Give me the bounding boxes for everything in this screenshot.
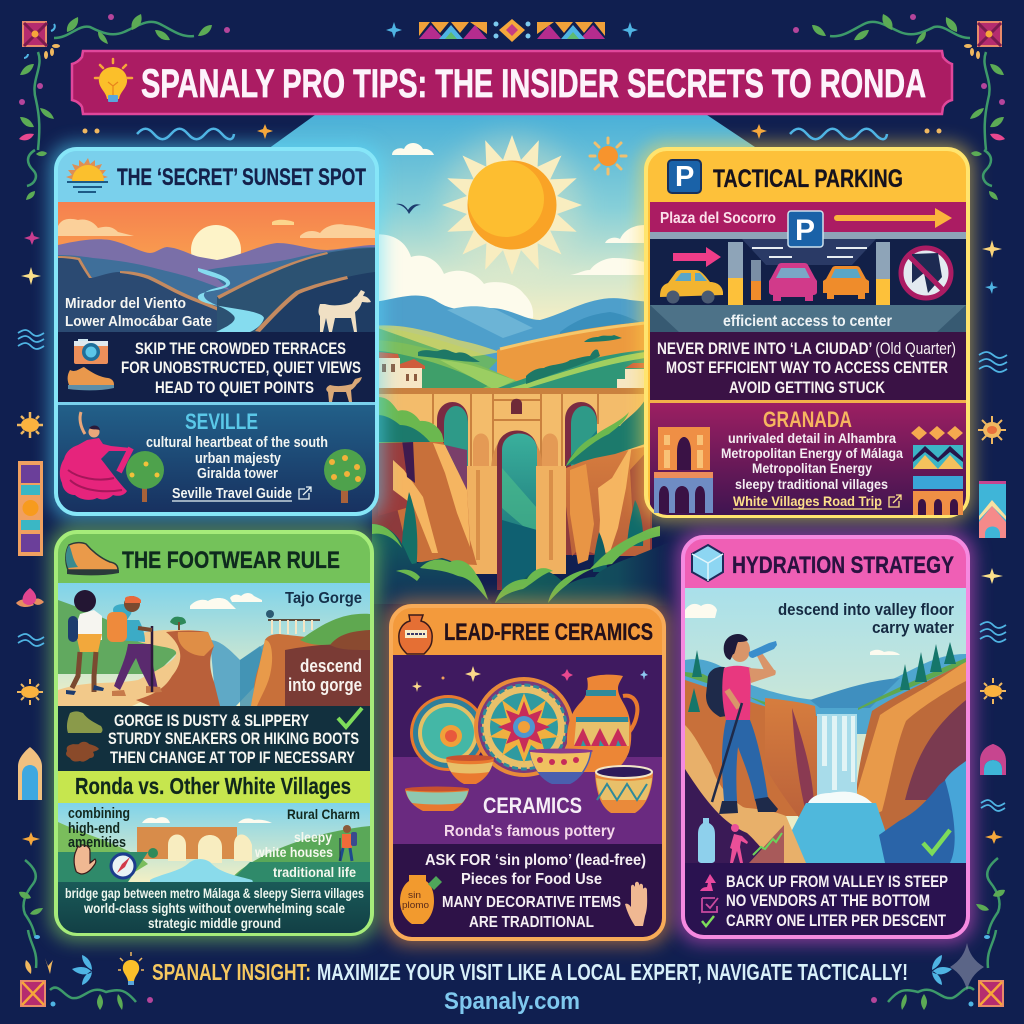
heading: THE ‘SECRET’ SUNSET SPOT — [117, 164, 366, 191]
icon: left orange tree — [126, 451, 164, 502]
piers — [466, 466, 497, 574]
icon: parking sign in header: P — [675, 161, 694, 193]
label: descend into gorge: descend — [300, 656, 362, 676]
label: carry water — [872, 619, 955, 637]
jug — [567, 675, 637, 772]
tip text: HEAD TO QUIET POINTS — [155, 378, 314, 397]
tip text: Pieces for Food Use — [461, 871, 602, 888]
tip text — [657, 339, 956, 397]
Granada text: Metropolitan Energy of Málaga — [721, 445, 903, 461]
tip text: STURDY SNEAKERS OR HIKING BOOTS — [108, 729, 359, 748]
Seville text: cultural heartbeat of the south — [146, 435, 328, 451]
plate left — [410, 695, 486, 771]
comparison text — [65, 885, 364, 931]
maroon gorge rear — [372, 478, 652, 555]
comparison text: world-class sights without overwhelming scale — [83, 900, 345, 916]
garage scene — [650, 239, 966, 333]
footer insight line — [72, 952, 952, 985]
buttress domes — [473, 434, 489, 466]
rolling hills — [379, 327, 497, 369]
tips list: NO VENDORS AT THE BOTTOM — [726, 892, 930, 910]
icon: parking sign — [788, 211, 823, 247]
labels: high-end amenities — [68, 806, 130, 851]
icon: parking sign in header — [668, 160, 701, 193]
hand icon — [74, 845, 96, 874]
website: Spanaly.com — [444, 988, 580, 1015]
icon: hiking shoe — [68, 367, 114, 390]
right arch — [565, 402, 597, 470]
icon: mud splat — [66, 742, 99, 762]
row under banner: waves, stars, dots — [82, 124, 942, 139]
Granada text: White Villages Road Trip — [733, 493, 882, 509]
icon: right orange tree — [324, 449, 366, 503]
tip text: NEVER DRIVE INTO ‘LA CIUDAD’ (Old Quarter) — [657, 339, 956, 358]
icon: ice cube — [692, 545, 723, 581]
tip text: FOR UNOBSTRUCTED, QUIET VIEWS — [121, 358, 361, 377]
Granada text — [721, 430, 903, 509]
bowl small centre — [446, 755, 494, 784]
Seville text: urban majesty — [195, 451, 281, 467]
icon: check mark — [923, 830, 950, 853]
Seville text: Giralda tower — [197, 466, 278, 482]
icon: bulb — [118, 952, 144, 985]
labels: rural villages: traditional life — [273, 864, 356, 880]
link underline and icon — [733, 495, 901, 509]
cypress trees — [402, 492, 418, 564]
hiker woman 1 — [77, 610, 102, 640]
ceramics group — [405, 675, 653, 813]
orange car — [823, 266, 869, 299]
icon: Alhambra arch — [654, 427, 713, 513]
label: descend into valley floor — [778, 601, 955, 619]
footer insight line: SPANALY INSIGHT: — [152, 959, 311, 985]
icon: flamenco dancer — [60, 412, 131, 500]
small hiker — [340, 825, 357, 861]
comparison text: strategic middle ground — [148, 915, 281, 931]
panel glows — [50, 143, 974, 945]
icon: sunset — [66, 158, 108, 192]
icon: stop hand — [625, 882, 647, 926]
icon: check mark — [338, 708, 362, 727]
labels: rural villages — [254, 829, 356, 880]
subheading: Ronda vs. Other White Villages — [75, 773, 351, 799]
panel: tactical parking — [646, 149, 968, 517]
right side ornaments — [971, 150, 1007, 939]
scene: bridge and villages — [58, 803, 370, 883]
sparkles — [412, 666, 648, 692]
label: Plaza del Socorro: Plaza del Socorro — [660, 210, 776, 227]
tip text: AVOID GETTING STUCK — [729, 378, 886, 397]
top ornament band — [386, 19, 638, 42]
arrow — [834, 208, 952, 228]
tip text: THEN CHANGE AT TOP IF NECESSARY — [110, 748, 355, 767]
caption: Ronda's famous pottery — [444, 823, 615, 840]
scene: hikers and gorge — [58, 583, 370, 706]
heading: THE FOOTWEAR RULE — [122, 547, 340, 574]
labels: rural villages: sleepy — [294, 829, 332, 845]
cup right — [595, 766, 653, 813]
label — [778, 601, 955, 637]
pink arrow — [673, 247, 721, 267]
labels: rural villages: white houses — [254, 844, 333, 860]
label: Rural Charm: Rural Charm — [287, 806, 360, 822]
icon: pottery vase — [399, 615, 432, 654]
plate right — [474, 677, 574, 777]
left flourish — [72, 955, 92, 985]
place labels — [65, 296, 212, 330]
labels: high-end amenities: amenities — [68, 835, 126, 851]
label: descend into gorge — [288, 656, 362, 695]
panel: lead-free ceramics — [391, 606, 664, 939]
corner vine bottom-left — [21, 930, 153, 1010]
Seville text: Seville Travel Guide — [172, 486, 292, 502]
big sun — [442, 135, 582, 275]
label: descend into gorge: into gorge — [288, 675, 362, 695]
panel: hydration strategy — [683, 537, 976, 937]
icon: camera — [74, 339, 108, 364]
icon: sin plomo jar — [400, 875, 442, 924]
tip text: SKIP THE CROWDED TERRACES — [135, 339, 346, 358]
labels: high-end amenities: combining — [68, 806, 130, 822]
place labels: Lower Almocábar Gate — [65, 314, 212, 330]
heading: HYDRATION STRATEGY — [732, 552, 954, 579]
pink car — [769, 263, 817, 301]
tip text — [425, 852, 646, 931]
hiker man — [113, 604, 145, 642]
icon: tribal pattern stack — [911, 426, 963, 515]
pine trees — [688, 642, 956, 712]
label: Tajo Gorge: Tajo Gorge — [285, 590, 362, 607]
tip text — [108, 711, 359, 767]
left cliff — [393, 440, 477, 565]
river — [198, 268, 264, 332]
heading: LEAD-FREE CERAMICS — [444, 619, 653, 646]
chapel window — [511, 399, 522, 414]
Granada text: Metropolitan Energy — [752, 460, 872, 476]
label: ceramics: CERAMICS — [483, 793, 582, 818]
tip text: GORGE IS DUSTY & SLIPPERY — [114, 711, 310, 730]
Granada text: unrivaled detail in Alhambra — [728, 430, 896, 446]
corner vine top-right — [793, 14, 1005, 150]
bottom foliage — [372, 524, 492, 604]
caption: efficient access to center — [723, 313, 892, 330]
comparison text: bridge gap between metro Málaga & sleepy Sierra villages — [65, 885, 364, 901]
Granada text: sleepy traditional villages — [735, 476, 888, 492]
small sun — [590, 138, 626, 174]
bridge — [372, 388, 652, 590]
blue mountains — [379, 296, 644, 372]
link underline and icon — [172, 487, 311, 501]
no entry — [901, 248, 951, 298]
labels: high-end amenities: high-end — [68, 821, 120, 837]
corner vine bottom-right — [871, 930, 1003, 1010]
hiker — [706, 634, 778, 814]
bowl blue — [529, 748, 593, 784]
houses — [378, 352, 648, 389]
left arch — [437, 402, 468, 444]
tip text: MOST EFFICIENT WAY TO ACCESS CENTER — [666, 358, 948, 377]
icon: sin plomo jar: plomo — [402, 900, 429, 910]
subheading: Granada: GRANADA — [763, 407, 852, 432]
tips list — [700, 873, 948, 930]
tip text: MANY DECORATIVE ITEMS — [442, 894, 621, 911]
yellow car — [660, 270, 723, 297]
place labels: Mirador del Viento — [65, 296, 186, 312]
icon: hiking boot — [66, 543, 119, 575]
goat — [318, 290, 371, 332]
compass icon — [111, 854, 135, 878]
corner vine top-left — [19, 14, 230, 150]
icon: light bulb — [95, 59, 132, 102]
clouds — [372, 143, 645, 318]
tip text — [121, 339, 361, 397]
central arch — [491, 444, 542, 466]
scene: sunset and valley — [58, 202, 375, 332]
sky dome — [268, 115, 758, 322]
ledge and path — [685, 760, 791, 863]
right cliff — [566, 446, 650, 556]
icon: shoe — [67, 711, 102, 733]
heading: TACTICAL PARKING — [713, 165, 903, 193]
icon: sin plomo jar: sin — [408, 890, 421, 900]
tips list: CARRY ONE LITER PER DESCENT — [726, 912, 946, 930]
title banner — [72, 51, 952, 114]
central illustration: Ronda landscape and Puente Nuevo — [372, 135, 670, 606]
icon: parking sign: P — [795, 214, 815, 247]
tips list: BACK UP FROM VALLEY IS STEEP — [726, 873, 948, 891]
right flourish — [932, 955, 952, 985]
scene: canyon and waterfall — [685, 588, 976, 863]
tip text: ASK FOR ‘sin plomo’ (lead-free) — [425, 852, 646, 869]
bird — [396, 204, 421, 214]
left side ornaments — [16, 150, 47, 939]
Seville text — [146, 435, 328, 502]
watermark sparkle — [950, 943, 984, 991]
panel: the footwear rule — [56, 532, 372, 934]
icon row: bottle, walker, slope — [698, 818, 784, 863]
tip text: ARE TRADITIONAL — [469, 914, 594, 931]
top foliage — [378, 397, 444, 443]
panel: the secret sunset spot — [56, 149, 377, 515]
bowl lower left — [405, 786, 469, 811]
icon: goat silhouette — [326, 377, 362, 402]
subheading: Seville: SEVILLE — [185, 409, 258, 434]
